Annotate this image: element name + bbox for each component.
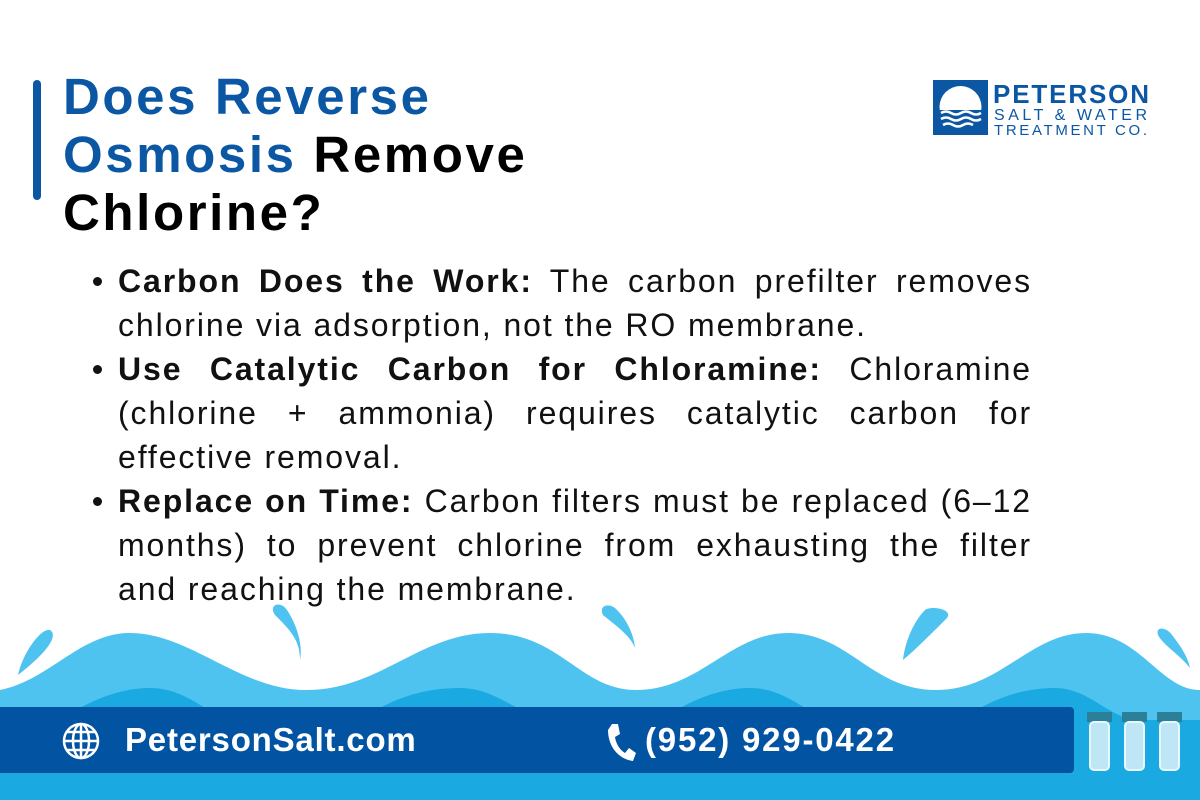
website: PetersonSalt.com	[125, 721, 417, 758]
bullet 3: and reaching the membrane.	[118, 571, 577, 607]
bullet 2: (chlorine + ammonia) requires catalytic carbon for	[118, 395, 1032, 431]
bullet 1: Carbon Does the Work: The carbon prefilter removes	[118, 263, 1032, 299]
title: Does Reverse	[63, 68, 432, 125]
bullet 2	[118, 347, 1032, 479]
waves and drops	[0, 604, 1200, 800]
accent bar	[33, 80, 41, 200]
bullet 1: chlorine via adsorption, not the RO membrane.	[118, 307, 867, 343]
filters icon	[1087, 712, 1182, 770]
bullet 2: effective removal.	[118, 439, 402, 475]
bullet 1	[118, 259, 1032, 347]
logo: SALT & WATER	[994, 107, 1147, 124]
bullet 3: months) to prevent chlorine from exhausting the filter	[118, 527, 1032, 563]
footer bar	[0, 707, 1074, 773]
title	[63, 68, 527, 241]
title: Osmosis Remove	[63, 126, 527, 183]
bullet 2: Use Catalytic Carbon for Chloramine: Chloramine	[118, 351, 1032, 387]
bullet list	[93, 263, 1032, 607]
icon: phone	[608, 724, 636, 761]
logo	[933, 80, 1149, 136]
drops	[18, 605, 1190, 675]
phone number: (952) 929-0422	[645, 721, 896, 758]
bullet 3: Replace on Time: Carbon filters must be replaced (6–12	[118, 483, 1032, 519]
icon: globe	[62, 722, 100, 760]
title: Chlorine?	[63, 184, 324, 241]
bullet 3	[118, 479, 1032, 611]
